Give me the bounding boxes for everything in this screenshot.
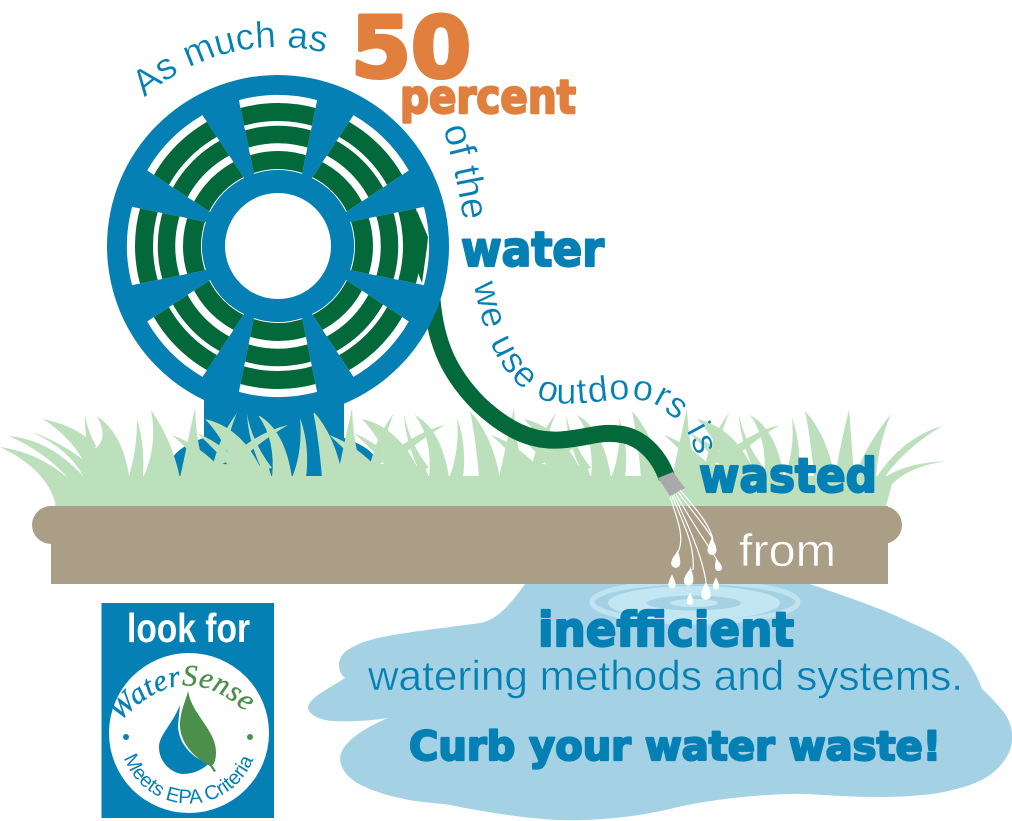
- badge circle: [109, 653, 269, 813]
- badge dot left: [123, 734, 129, 740]
- text: of the: of the: [445, 126, 484, 218]
- garden hose: [432, 300, 667, 478]
- text: watering methods and systems.: watering methods and systems.: [367, 652, 963, 699]
- hose nozzle: [658, 472, 685, 496]
- WaterSense badge: [102, 603, 274, 818]
- soil ledge: [32, 506, 902, 584]
- icon: water drop: [159, 705, 209, 774]
- text: Curb your water waste!: Curb your water waste!: [409, 724, 941, 770]
- water droplets: [668, 537, 723, 605]
- text: water: water: [461, 222, 604, 278]
- ripples in puddle: [592, 582, 798, 622]
- badge tagline: Meets EPA Criteria: [124, 753, 254, 804]
- grass: [0, 408, 947, 506]
- text: percent: percent: [400, 70, 576, 124]
- text: 50: 50: [351, 0, 471, 97]
- text: inefficient: inefficient: [538, 603, 794, 658]
- badge wordmark: WaterSense: [112, 666, 253, 718]
- text: As much as: As much as: [136, 20, 326, 98]
- text: from: from: [739, 525, 836, 576]
- badge dot right: [247, 734, 253, 740]
- puddle: [308, 584, 1012, 820]
- text: wasted: wasted: [699, 449, 877, 504]
- badge heading: look for: look for: [127, 605, 250, 651]
- hose reel: [76, 44, 480, 448]
- icon: leaf: [180, 691, 216, 772]
- reel stand and base: [170, 395, 378, 504]
- water streams: [670, 490, 717, 582]
- text: we use outdoors is: we use outdoors is: [474, 280, 713, 453]
